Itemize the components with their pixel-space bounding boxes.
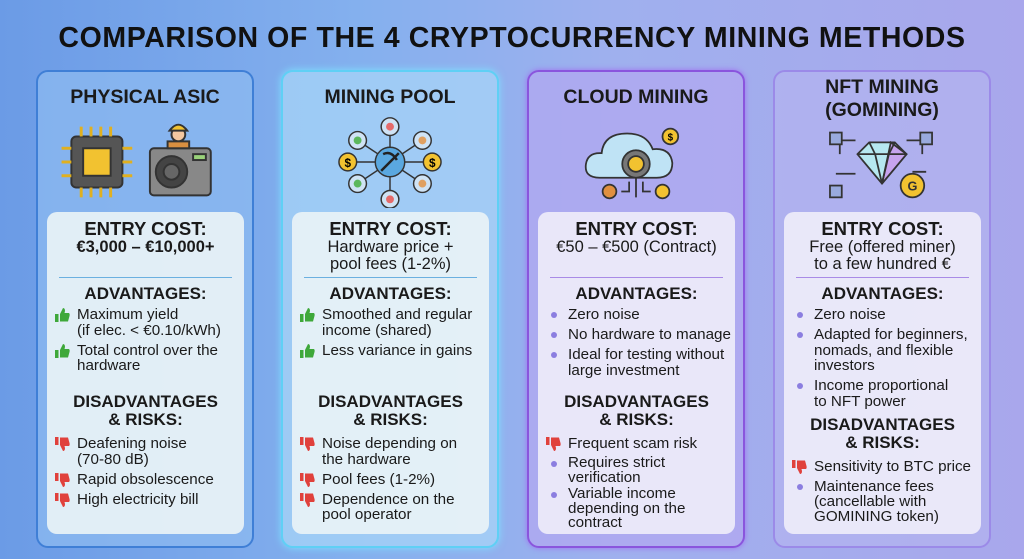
inner box [784, 212, 981, 534]
disadvantages list: Requires strict [568, 454, 665, 471]
entry cost: ENTRY COST: [329, 218, 452, 239]
advantages list: Less variance in gains [322, 342, 472, 358]
disadvantages list: Variable income [568, 485, 676, 502]
icon: cloud with gear: $ [668, 132, 674, 143]
advantages heading: ADVANTAGES: [575, 284, 698, 303]
disadvantages list: the hardware [322, 450, 411, 468]
disadvantages list: High electricity bill [77, 490, 199, 508]
disadvantages heading: & RISKS: [845, 433, 920, 452]
disadvantages heading: & RISKS: [108, 410, 183, 429]
advantages list: hardware [77, 357, 140, 374]
title: COMPARISON OF THE 4 CRYPTOCURRENCY MINING METHODS [58, 22, 966, 54]
advantages heading: ADVANTAGES: [821, 284, 944, 303]
advantages list: No hardware to manage [568, 326, 731, 343]
advantages list: Adapted for beginners, [814, 326, 968, 343]
advantages list: Ideal for testing without [568, 346, 724, 363]
panel: cloud mining [527, 70, 745, 548]
disadvantages list: Dependence on the [322, 490, 455, 508]
disadvantages heading: & RISKS: [353, 410, 428, 429]
panel: nft mining [773, 70, 991, 548]
entry cost: pool fees (1-2%) [330, 255, 451, 273]
advantages list: nomads, and flexible [814, 342, 953, 358]
disadvantages list [792, 458, 971, 525]
inner box [47, 212, 244, 534]
entry cost: ENTRY COST: [575, 218, 698, 239]
disadvantages heading [810, 415, 955, 452]
disadvantages heading: DISADVANTAGES [564, 392, 709, 411]
advantages list: Zero noise [814, 306, 886, 323]
disadvantages list: verification [568, 468, 641, 486]
icon: cloud with gear [584, 128, 680, 200]
heading: mining pool: MINING POOL [324, 86, 456, 108]
disadvantages list [300, 435, 457, 523]
icon: diamond with G coin: G [907, 178, 917, 193]
inner box [538, 212, 735, 534]
advantages list: (if elec. < €0.10/kWh) [77, 322, 221, 338]
entry cost [809, 218, 956, 273]
disadvantages list: contract [568, 514, 622, 531]
disadvantages list: pool operator [322, 506, 412, 523]
disadvantages heading: & RISKS: [599, 410, 674, 429]
disadvantages list: Maintenance fees [814, 478, 934, 495]
advantages list: Zero noise [568, 306, 640, 323]
disadvantages list: Frequent scam risk [568, 435, 697, 452]
advantages list: income (shared) [322, 322, 432, 338]
disadvantages heading [318, 392, 463, 429]
advantages list [300, 306, 472, 358]
icon: pool network [338, 117, 442, 208]
disadvantages heading [73, 392, 218, 429]
disadvantages list [546, 435, 697, 531]
entry cost: ENTRY COST: [821, 218, 944, 239]
advantages list [55, 306, 221, 374]
disadvantages list: Deafening noise [77, 435, 187, 452]
advantages list: investors [814, 357, 875, 374]
inner box [292, 212, 489, 534]
disadvantages list: Noise depending on [322, 435, 457, 452]
disadvantages heading [564, 392, 709, 429]
panel: physical asic [36, 70, 254, 548]
advantages list: Smoothed and regular [322, 306, 472, 323]
entry cost: €3,000 – €10,000+ [76, 238, 215, 256]
entry cost: to a few hundred € [814, 255, 951, 273]
advantages heading: ADVANTAGES: [329, 284, 452, 303]
entry cost: Free (offered miner) [809, 238, 956, 256]
disadvantages list: Sensitivity to BTC price [814, 458, 971, 475]
disadvantages heading: DISADVANTAGES [318, 392, 463, 411]
icon: pool network: $ [429, 157, 436, 170]
disadvantages heading: DISADVANTAGES [73, 392, 218, 411]
entry cost: €50 – €500 (Contract) [556, 238, 717, 256]
icon: chip and miner [62, 124, 212, 198]
heading: nft mining: NFT MINING [825, 76, 939, 98]
heading: physical asic: PHYSICAL ASIC [70, 86, 220, 108]
entry cost [76, 218, 215, 256]
panel: mining pool [281, 70, 499, 548]
advantages list [797, 306, 968, 410]
advantages list: Income proportional [814, 377, 948, 394]
disadvantages list: (70-80 dB) [77, 450, 149, 468]
icon: pool network: $ [345, 157, 352, 170]
entry cost: ENTRY COST: [84, 218, 207, 239]
disadvantages list: Rapid obsolescence [77, 470, 214, 488]
entry cost: Hardware price + [327, 238, 454, 256]
advantages list: to NFT power [814, 392, 906, 410]
entry cost [556, 218, 717, 256]
advantages list: Total control over the [77, 342, 218, 358]
disadvantages list: GOMINING token) [814, 508, 939, 525]
advantages list: Maximum yield [77, 306, 178, 323]
heading: nft mining [825, 76, 939, 121]
entry cost [327, 218, 454, 273]
disadvantages heading: DISADVANTAGES [810, 415, 955, 434]
disadvantages list: depending on the [568, 500, 685, 516]
heading: cloud mining: CLOUD MINING [563, 86, 709, 108]
icon: diamond with G coin [829, 132, 933, 198]
advantages list: large investment [568, 362, 679, 378]
disadvantages list: Pool fees (1-2%) [322, 470, 435, 488]
advantages heading: ADVANTAGES: [84, 284, 207, 303]
advantages list [551, 306, 731, 378]
disadvantages list [55, 435, 214, 508]
heading: nft mining: (GOMINING) [825, 99, 939, 121]
disadvantages list: (cancellable with [814, 493, 926, 510]
